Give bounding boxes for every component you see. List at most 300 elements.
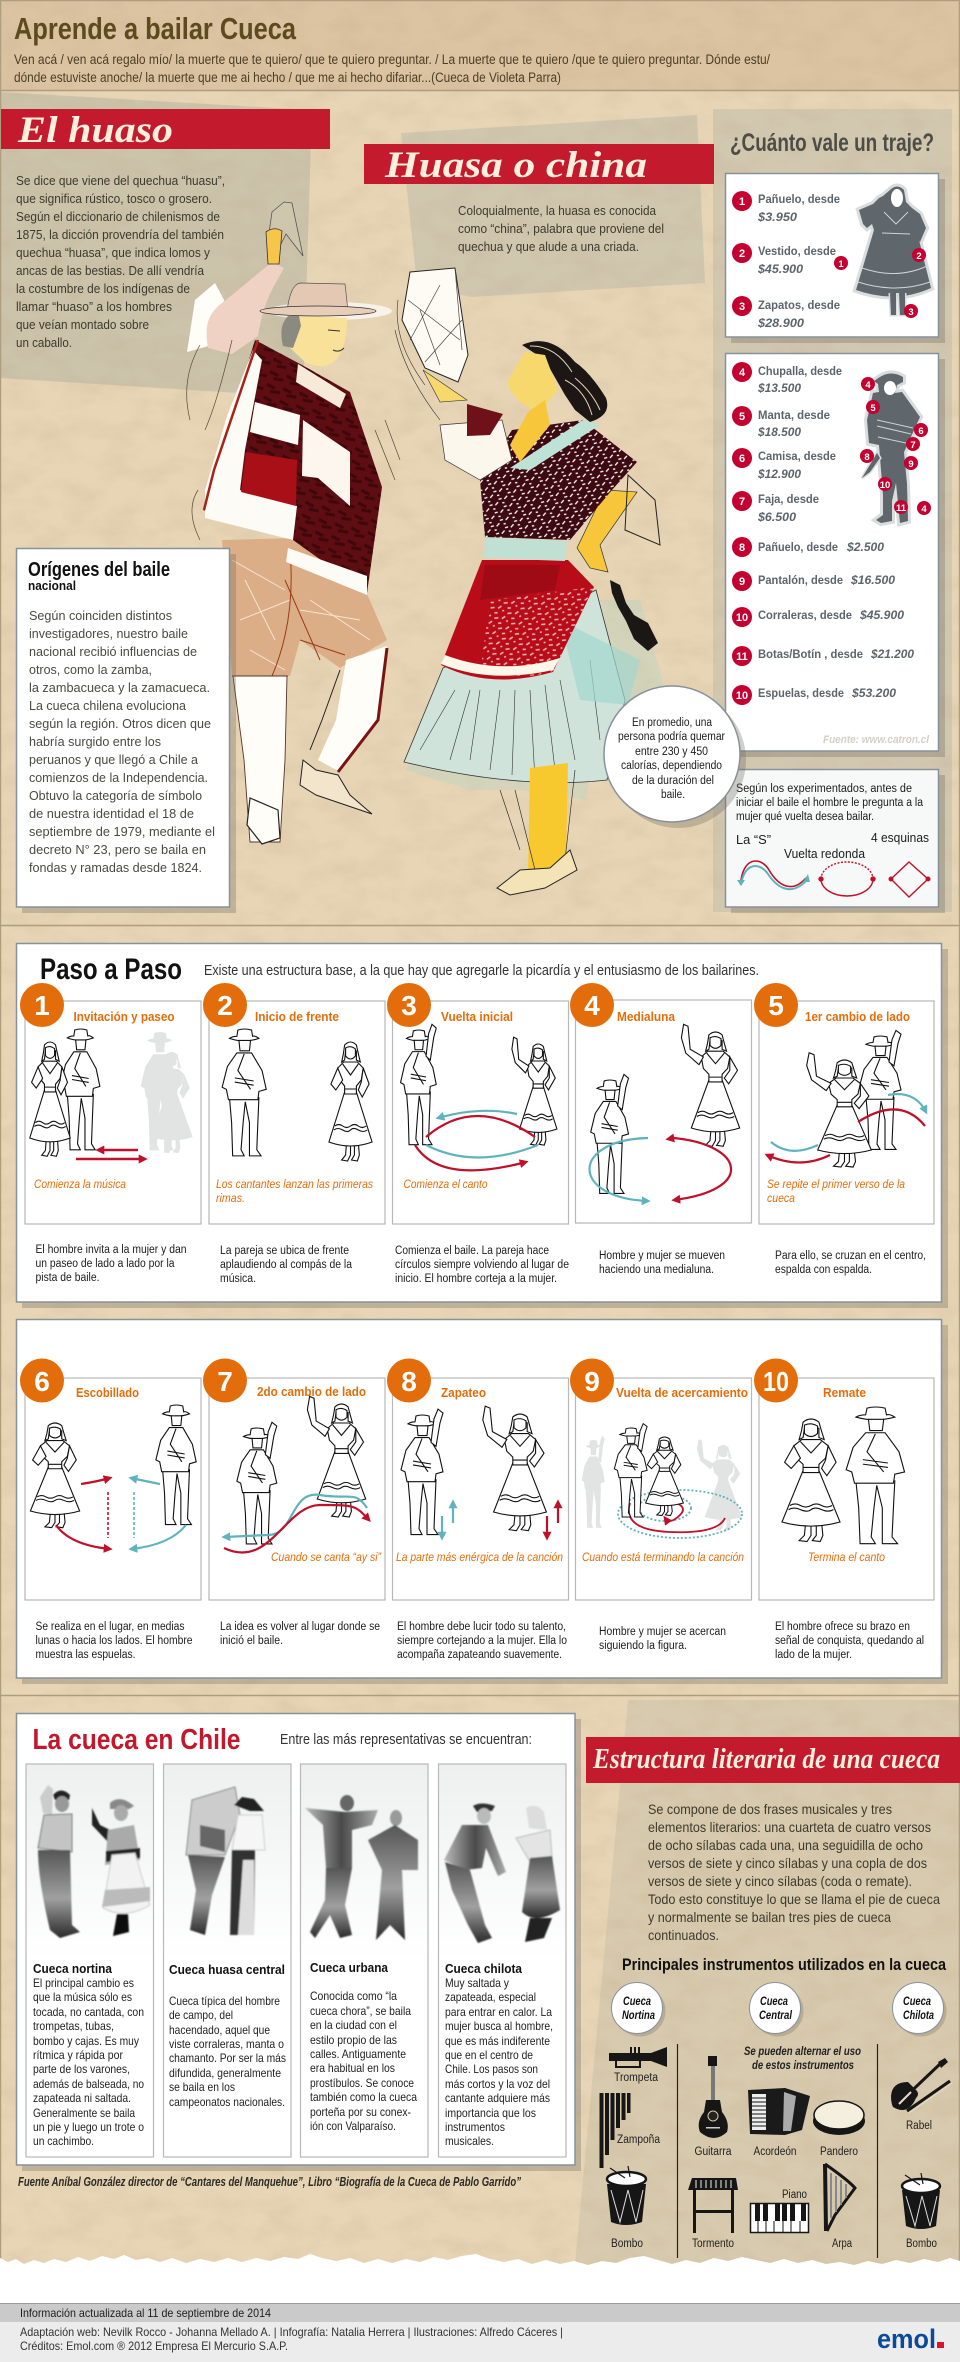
text block: estructura: elementos literarios: una cuarteta de cuatro versos — [648, 1819, 931, 1835]
step 10 — [754, 1358, 934, 1661]
text: la zambacueca y la zamacueca. — [29, 680, 210, 695]
price list: 6 — [739, 453, 745, 465]
card: cueca huasa central: de campo, del — [169, 2008, 233, 2022]
text block: el huaso: Se dice que viene del quechua “huasu”, — [16, 173, 225, 188]
badge: cueca central — [750, 1982, 804, 2036]
badge: cueca central: Cueca — [760, 1996, 788, 2008]
illustration: huaso dancer — [187, 202, 400, 844]
card: cueca nortina: rítmica y rápida por — [33, 2048, 123, 2062]
instruments section: Arpa — [832, 2238, 852, 2250]
card: cueca nortina: bombo y cajas. Es muy — [33, 2034, 139, 2048]
card: cueca huasa central: Cueca típica del hombre — [169, 1994, 280, 2008]
badge row 1: 1 — [739, 196, 745, 208]
step 8: siempre cortejando a la mujer. Ella lo — [397, 1635, 567, 1647]
step 9: Cuando está terminando la canción — [582, 1550, 744, 1564]
lyrics: dónde estuviste anoche/ la muerte que me ai hecho / que me ai hecho difariar...(Cueca de Violeta Parra) — [14, 70, 561, 85]
title: Aprende a bailar Cueca — [14, 11, 297, 46]
panel: vueltas — [726, 770, 945, 913]
text block: el huaso: un caballo. — [16, 335, 72, 350]
price list: $16.500 — [850, 573, 895, 587]
illustration: huasa dancer — [395, 268, 665, 895]
labels — [736, 830, 929, 861]
price list: 10 — [736, 690, 748, 702]
source: Fuente: www.catron.cl — [823, 734, 930, 746]
step 2 — [203, 983, 385, 1285]
splatter teal — [405, 600, 665, 800]
badge row 1: Pañuelo, desde — [758, 192, 840, 206]
card: cueca nortina: tocada, no cantada, con — [33, 2005, 144, 2019]
price list: Espuelas, desde — [758, 686, 844, 700]
heading: La cueca en Chile — [32, 1724, 240, 1756]
card: cueca huasa central: viste corraleras, manta o — [169, 2037, 284, 2051]
card: cueca urbana — [300, 1764, 428, 2157]
step 9: Hombre y mujer se acercan — [599, 1626, 726, 1638]
callout: calorias: En promedio, una — [632, 717, 713, 729]
small markers: 8 — [864, 452, 870, 463]
step 5: cueca — [767, 1191, 795, 1205]
card: cueca huasa central — [164, 1764, 291, 2157]
price list: $45.900 — [859, 608, 904, 622]
text block: huasa: Coloquialmente, la huasa es conocida — [458, 203, 657, 218]
small markers: 11 — [896, 503, 907, 514]
text: habría surgido entre los — [29, 734, 161, 749]
labels: La “S” — [736, 832, 771, 847]
step 1: 1 — [34, 990, 50, 1021]
card: cueca chilota: más cortos y la voz del — [445, 2077, 550, 2091]
small markers: 5 — [870, 403, 876, 414]
card: cueca nortina — [26, 1764, 154, 2157]
step 3: círculos siempre volviendo al lugar de — [395, 1259, 569, 1271]
small markers — [834, 248, 926, 318]
price list: $6.500 — [757, 510, 796, 524]
step 8: 8 — [401, 1366, 417, 1397]
red skirt — [441, 560, 594, 680]
step 10: señal de conquista, quedando al — [775, 1635, 924, 1647]
step 4: haciendo una medialuna. — [599, 1264, 714, 1276]
step 9 — [570, 1358, 752, 1652]
badge: cueca central: Central — [759, 2010, 793, 2022]
badge row 3: $28.900 — [757, 316, 804, 330]
price list: $18.500 — [757, 425, 801, 439]
stockings and shoe — [528, 763, 568, 876]
callout: calorias: persona podría quemar — [618, 731, 725, 743]
step 10: El hombre ofrece su brazo en — [775, 1621, 910, 1633]
credits: Créditos: Emol.com ® 2012 Empresa El Mercurio S.A.P. — [20, 2339, 288, 2353]
step 2: La pareja se ubica de frente — [220, 1245, 349, 1257]
step 4: Hombre y mujer se mueven — [599, 1250, 725, 1262]
step 2: rimas. — [216, 1191, 245, 1205]
price list: Botas/Botín , desde — [758, 647, 863, 661]
card: cueca urbana: prostíbulos. Se conoce — [310, 2076, 414, 2090]
card: cueca urbana: cueca chora”, se baila — [310, 2004, 411, 2018]
lyrics — [14, 52, 770, 85]
text: La cueca chilena evoluciona — [29, 698, 187, 713]
callout: calorias: calorías, dependiendo — [621, 760, 722, 772]
step 7: 2do cambio de lado — [257, 1384, 366, 1399]
banner: Huasa o china: Huasa o china — [384, 145, 647, 186]
step 1 — [20, 983, 201, 1284]
footer — [0, 2303, 960, 2362]
note: alternating: de estos instrumentos — [752, 2060, 854, 2072]
step 8: La parte más enérgica de la canción — [396, 1550, 563, 1564]
step 3 — [387, 983, 569, 1285]
step 10: lado de la mujer. — [775, 1649, 852, 1661]
text block: estructura: versos de siete y cinco sílabas y una copla de dos — [648, 1855, 927, 1871]
overskirt — [404, 590, 625, 783]
text block: el huaso: la costumbre de los indígenas de — [16, 281, 190, 296]
price list: $21.200 — [870, 647, 914, 661]
text block: el huaso: ancas de las bestias. De allí vendría — [16, 263, 205, 278]
blouse — [480, 420, 637, 540]
text block: huasa: quechua y que alude a una criada. — [458, 239, 639, 254]
card: cueca urbana: ión con Valparaíso. — [310, 2119, 396, 2133]
photo: nortina dancers — [38, 1785, 150, 1938]
card: cueca nortina: Generalmente se baila — [33, 2106, 135, 2120]
small markers: 3 — [908, 307, 914, 318]
header — [14, 11, 770, 85]
step 8: Zapateo — [441, 1385, 486, 1400]
text: comienzos de la Independencia. — [29, 770, 208, 785]
text: Según los experimentados, antes de — [736, 783, 912, 795]
card: cueca chilota: mujer busca al hombre, — [445, 2019, 553, 2033]
price list: Camisa, desde — [758, 449, 836, 463]
note: alternating: Se pueden alternar el uso — [744, 2046, 861, 2058]
small markers: 10 — [880, 480, 890, 491]
price list: Corraleras, desde — [758, 608, 852, 622]
price list: Chupalla, desde — [758, 364, 842, 378]
text block: huasa: como “china”, palabra que proviene del — [458, 221, 664, 236]
step 5: 1er cambio de lado — [805, 1009, 910, 1024]
instruments section — [600, 1956, 952, 2258]
small markers — [860, 377, 931, 515]
card: cueca urbana: también como la cueca — [310, 2090, 417, 2104]
icon: man silhouette — [862, 373, 920, 523]
text block: estructura: versos de siete y cinco sílabas (coda o remate). — [648, 1873, 912, 1889]
step 6: muestra las espuelas. — [36, 1649, 136, 1661]
price list: $13.500 — [757, 381, 801, 395]
label: piano: Piano — [782, 2189, 807, 2201]
text: mujer qué vuelta desea bailar. — [736, 811, 874, 823]
step 2: Inicio de frente — [255, 1009, 339, 1024]
icon: trumpet — [609, 2047, 667, 2067]
panel: paso a paso 1-5 — [16, 944, 948, 1308]
card: cueca nortina: El principal cambio es — [33, 1976, 134, 1990]
step 5 — [754, 983, 934, 1276]
badge: cueca chilota: Cueca — [903, 1996, 931, 2008]
step 7: 7 — [217, 1366, 233, 1397]
card: cueca huasa central: chamanto. Por ser la más — [169, 2051, 286, 2065]
labels: Vuelta redonda — [784, 846, 866, 861]
boots — [233, 676, 287, 842]
card: cueca urbana: Cueca urbana — [310, 1960, 389, 1975]
step 3: Comienza el canto — [404, 1177, 488, 1191]
text block: el huaso: 1875, la dicción provendría del también — [16, 227, 224, 242]
text — [736, 783, 924, 823]
icon: tormento — [688, 2178, 738, 2233]
labels: 4 esquinas — [871, 830, 929, 845]
card: cueca urbana: en la ciudad con el — [310, 2018, 397, 2032]
instruments section: Guitarra — [694, 2146, 732, 2158]
price list: 5 — [739, 411, 745, 423]
badge: cueca nortina: Cueca — [623, 1996, 651, 2008]
text: decreto N° 23, pero se baila en — [29, 842, 206, 857]
icon: piano — [750, 2204, 808, 2233]
handkerchief — [268, 202, 303, 256]
text: investigadores, nuestro baile — [29, 626, 188, 641]
banner: Huasa o china — [364, 144, 714, 186]
diagram: diamond — [889, 862, 930, 897]
badge row 2: 2 — [739, 248, 745, 260]
text: fondas y ramadas desde 1824. — [29, 860, 202, 875]
splatter black — [610, 580, 658, 651]
card: cueca nortina: además de balseada, no — [33, 2077, 144, 2091]
step 10: Remate — [823, 1385, 866, 1400]
price list: Pantalón, desde — [758, 573, 843, 587]
card: cueca urbana: calles. Antiguamente — [310, 2047, 406, 2061]
step 10: Termina el canto — [808, 1550, 885, 1564]
step 9: Vuelta de acercamiento — [616, 1385, 748, 1400]
text block: el huaso: Según el diccionario de chilenismos de — [16, 209, 220, 224]
card: cueca chilota: musicales. — [445, 2134, 494, 2148]
text block: estructura: y normalmente se bailan tres pies de cueca — [648, 1909, 891, 1925]
step 4: Medialuna — [617, 1009, 676, 1024]
step 7: La idea es volver al lugar donde se — [220, 1621, 380, 1633]
badge: cueca chilota: Chilota — [903, 2010, 934, 2022]
step 8: acompaña zapateando suavemente. — [397, 1649, 562, 1661]
card: cueca chilota: cantante adquiere más — [445, 2091, 550, 2105]
step 9: 9 — [584, 1366, 600, 1397]
instruments section: Tormento — [692, 2238, 734, 2250]
card: cueca huasa central: difundida, generalmente — [169, 2066, 281, 2080]
text block: el huaso — [16, 173, 225, 350]
card: cueca chilota: importancia que los — [445, 2106, 536, 2120]
hat and face — [268, 302, 392, 320]
right arm — [577, 490, 637, 572]
intro: Existe una estructura base, a la que hay que agregarle la picardía y el entusiasmo de los bailarines. — [204, 962, 759, 979]
text block: estructura — [648, 1801, 940, 1943]
step 6 — [20, 1358, 201, 1661]
card: cueca urbana: Conocida como “la — [310, 1989, 397, 2003]
small markers: 6 — [918, 426, 924, 437]
step 8 — [387, 1358, 568, 1661]
photo: chilota dancers — [444, 1804, 560, 1943]
text block: el huaso: llamar “huaso” a los hombres — [16, 299, 172, 314]
instruments section: Pandero — [820, 2146, 858, 2158]
step 6: 6 — [34, 1366, 50, 1397]
card: cueca chilota: que es más indiferente — [445, 2034, 550, 2048]
badge row 3: 3 — [739, 301, 745, 313]
small markers: 2 — [916, 251, 922, 262]
card: cueca chilota: zapateada, especial — [445, 1990, 536, 2004]
face and hair — [522, 341, 607, 422]
step 5: espalda con espalda. — [775, 1264, 872, 1276]
card: cueca huasa central: campeonatos nacionales. — [169, 2095, 285, 2109]
step 7: Cuando se canta “ay si” — [271, 1550, 382, 1564]
trousers — [222, 538, 387, 676]
step 3: Vuelta inicial — [441, 1009, 513, 1024]
card: cueca nortina: zapateada ni saltada. — [33, 2091, 131, 2105]
step 7: inició el baile. — [220, 1635, 283, 1647]
card: cueca urbana: porteña por su conex- — [310, 2105, 411, 2119]
text block: el huaso: que significa rústico, tosco o grosero. — [16, 191, 212, 206]
card: cueca huasa central: se baila en los — [169, 2080, 235, 2094]
text — [29, 608, 215, 875]
text: de nuestra identidad el 18 de — [29, 806, 194, 821]
price list: 4 — [739, 367, 746, 379]
icon: bombo nortina — [607, 2166, 646, 2225]
text: otros, como la zamba, — [29, 662, 152, 677]
text block: el huaso: quechua “huasa”, que indica lomos y — [16, 245, 210, 260]
lyrics: Ven acá / ven acá regalo mío/ la muerte que te quiero/ que te quiero preguntar. / La muerte que te quiero /que te quiero preguntar. Dónde estu/ — [14, 52, 770, 67]
step 6: lunas o hacia los lados. El hombre — [36, 1635, 192, 1647]
text: Obtuvo la categoría de símbolo — [29, 788, 202, 803]
instruments section: Zampoña — [617, 2134, 661, 2146]
step 5: Para ello, se cruzan en el centro, — [775, 1250, 926, 1262]
callout: calorias — [604, 686, 746, 828]
subheading: nacional — [28, 579, 76, 593]
card: cueca chilota: Chile. Los pasos son — [445, 2062, 538, 2076]
step 1: Invitación y paseo — [74, 1009, 175, 1024]
photo: urbana dancers — [305, 1795, 418, 1940]
photo: central dancers — [186, 1787, 265, 1935]
card: cueca urbana: era habitual en los — [310, 2061, 395, 2075]
icon: pandero — [813, 2101, 865, 2135]
callout: calorias: entre 230 y 450 — [635, 746, 708, 758]
price list: 8 — [739, 542, 745, 554]
card: cueca chilota — [438, 1764, 566, 2157]
price list: Pañuelo, desde — [758, 540, 838, 554]
step 3: 3 — [401, 990, 417, 1021]
step 4: 4 — [584, 990, 600, 1021]
panel: paso a paso 6-10 — [16, 1320, 948, 1684]
card: cueca nortina: parte de los varones, — [33, 2062, 130, 2076]
card: cueca chilota: instrumentos — [445, 2120, 505, 2134]
card: cueca huasa central: Cueca huasa central — [169, 1962, 285, 1977]
heading: Orígenes del baile — [28, 559, 170, 581]
poncho — [203, 340, 382, 593]
badge row 2: $45.900 — [757, 262, 803, 276]
banner: El huaso: El huaso — [17, 110, 173, 151]
badge: cueca nortina — [612, 1982, 666, 2036]
price list: Manta, desde — [758, 408, 830, 422]
step 7 — [203, 1358, 385, 1647]
price list: $53.200 — [851, 686, 896, 700]
credits — [20, 2325, 563, 2353]
icon: guitarra — [699, 2056, 728, 2138]
icon: zampona — [600, 2093, 630, 2168]
step 1: Comienza la música — [34, 1177, 126, 1191]
step 2: 2 — [217, 990, 233, 1021]
card: cueca nortina: trompetas, tubas, — [33, 2019, 114, 2033]
card: cueca nortina: un cachimbo. — [33, 2134, 94, 2148]
step 2: música. — [220, 1273, 256, 1285]
credits: Adaptación web: Nevilk Rocco - Johanna Mellado A. | Infografía: Natalia Herrera | Ilustraciones: Alfredo Cáceres | — [20, 2325, 563, 2339]
step 6: Se realiza en el lugar, en medias — [36, 1621, 185, 1633]
instruments section: Acordeón — [754, 2146, 796, 2158]
badge row 2 — [732, 243, 836, 276]
text: nacional recibió influencias de — [29, 644, 197, 659]
price list: 10 — [736, 612, 748, 624]
belt — [484, 537, 567, 561]
icon: woman silhouette — [856, 186, 931, 315]
text block: el huaso: que veían montado sobre — [16, 317, 149, 332]
card: cueca chilota: para entrar en calor. La — [445, 2005, 552, 2019]
text: peruanos y que llegó a Chile a — [29, 752, 199, 767]
step 3: Comienza el baile. La pareja hace — [395, 1245, 549, 1257]
text: según la región. Otros dicen que — [29, 716, 211, 731]
small markers: 9 — [908, 459, 914, 470]
callout: calorias: de la duración del — [632, 775, 714, 787]
price list: 11 — [736, 651, 748, 663]
step 3: inicio. El hombre corteja a la mujer. — [395, 1273, 557, 1285]
text block: huasa — [458, 203, 664, 254]
step 2: aplaudiendo al compás de la — [220, 1259, 353, 1271]
text block: estructura: Se compone de dos frases musicales y tres — [648, 1801, 892, 1817]
card: cueca nortina: que la música sólo es — [33, 1990, 132, 2004]
price list — [732, 362, 914, 705]
source note: Fuente Aníbal González director de “Cantares del Manquehue”, Libro “Biografía de la Cueca de Pablo Garrido” — [18, 2175, 522, 2189]
price list: $2.500 — [846, 540, 884, 554]
step 2: Los cantantes lanzan las primeras — [216, 1177, 373, 1191]
text: Según coinciden distintos — [29, 608, 172, 623]
step 9: siguiendo la figura. — [599, 1640, 687, 1652]
panel: origenes del baile — [16, 548, 236, 913]
step 1: El hombre invita a la mujer y dan — [36, 1244, 186, 1256]
step 1: pista de baile. — [36, 1272, 100, 1284]
small markers: 7 — [910, 440, 916, 451]
banner: El huaso — [1, 109, 330, 151]
icon: acordeon — [748, 2088, 810, 2135]
card: cueca nortina: un pie y luego un trote o — [33, 2120, 144, 2134]
tambourine handkerchief — [402, 268, 468, 382]
card: cueca chilota: Cueca chilota — [445, 1961, 523, 1976]
price list: 7 — [739, 496, 745, 508]
step 8: El hombre debe lucir todo su talento, — [397, 1621, 566, 1633]
card: cueca chilota: Muy saltada y — [445, 1976, 509, 1990]
step 10: 10 — [763, 1366, 789, 1397]
instruments section: Trompeta — [614, 2072, 659, 2084]
logo: emol: emol — [877, 2324, 936, 2354]
heading: Paso a Paso — [40, 953, 182, 986]
panel: traje de huaso — [726, 354, 945, 757]
diagram: S — [737, 861, 810, 889]
badge: cueca chilota — [892, 1982, 946, 2036]
callout: calorias: baile. — [661, 789, 685, 801]
icon: bombo chilota — [902, 2173, 940, 2229]
icon: rabel — [891, 2058, 952, 2113]
badge row 3 — [732, 296, 840, 330]
price list: $12.900 — [757, 467, 801, 481]
icon: arpa — [825, 2164, 855, 2231]
text: iniciar el baile el hombre le pregunta a la — [736, 797, 924, 809]
banner: estructura literaria — [586, 1737, 960, 1783]
badge row 1: $3.950 — [757, 210, 797, 224]
step 1: un paseo de lado a lado por la — [36, 1258, 175, 1270]
step 6: Escobillado — [76, 1385, 139, 1400]
step 5: 5 — [768, 990, 784, 1021]
panel: traje de huasa — [726, 174, 945, 343]
text block: estructura: continuados. — [648, 1927, 719, 1943]
torn paper edge — [0, 2254, 960, 2304]
small markers: 4 — [921, 504, 927, 515]
badge row 3: Zapatos, desde — [758, 298, 840, 312]
price list: 9 — [739, 576, 745, 588]
text block: estructura: de ocho sílabas cada una, una seguidilla de ocho — [648, 1837, 923, 1853]
update note: Información actualizada al 11 de septiembre de 2014 — [20, 2306, 271, 2320]
note: alternating — [744, 2046, 861, 2072]
card: cueca huasa central: hacendado, aquel que — [169, 2023, 270, 2037]
panel: la cueca en chile — [16, 1714, 581, 2171]
